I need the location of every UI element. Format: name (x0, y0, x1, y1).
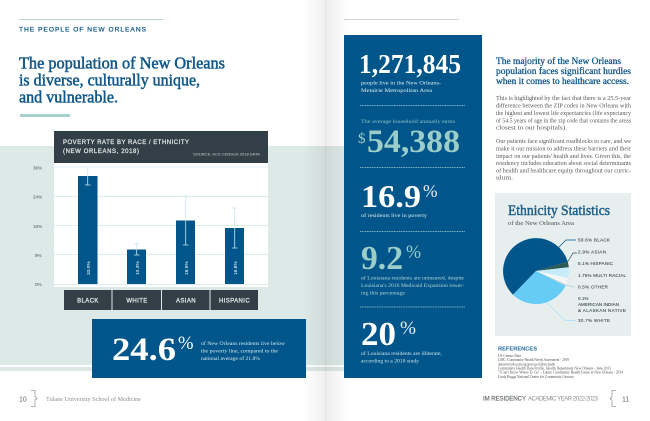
footer right (483, 390, 629, 406)
right column body text: of health and healthcare equity throughout our curric- (496, 168, 631, 174)
callout: 24.6% below poverty line: of New Orleans residents live below (201, 342, 285, 347)
panel: key statistics (344, 35, 482, 378)
bar: black 33.0% (78, 167, 98, 284)
right column heading: population faces significant hurdles (496, 66, 631, 77)
stat: household income: $ (358, 131, 366, 147)
stat: uninsured (361, 240, 465, 296)
ethnicity title (508, 203, 610, 227)
right column heading: when it comes to healthcare access. (496, 76, 629, 87)
references: "I Can't Know Where To Go" - Latino Community Health Issues in New Orleans - 2014 (498, 371, 623, 375)
pie legend labels: 1.75% MULTI RACIAL (578, 273, 626, 278)
references: datacenter.kidscount.org/america-children-health (498, 362, 555, 366)
ethnicity title: of the New Orleans Area (508, 220, 574, 227)
category labels: ASIAN (176, 298, 196, 304)
y axis labels: 9% (35, 253, 42, 258)
y axis labels: 36% (33, 166, 42, 170)
panel: poverty rate chart (33, 131, 268, 310)
footer right: ACADEMIC YEAR 2022-2023 (528, 396, 599, 402)
footer right: 11 (622, 396, 629, 404)
references: US Census Data (498, 354, 521, 358)
stat: uninsured: 9.2 (361, 240, 403, 277)
chart header (54, 131, 268, 163)
right column body text: the highest and lowest life expectancies (life expectancy (496, 110, 631, 117)
right column body text: closest to our hospitals). (496, 124, 568, 132)
pie leader lines (547, 240, 577, 320)
bar: asian 18.9%: 18.9% (184, 261, 190, 275)
category labels: HISPANIC (219, 298, 250, 304)
pie legend labels: AMERICAN INDIAN (578, 302, 619, 307)
category labels: BLACK (77, 298, 99, 304)
stat: uninsured: of Louisiana residents are uninsured, despite (361, 274, 465, 282)
y axis labels: 18% (33, 224, 42, 229)
left page headline: is diverse, culturally unique, (19, 70, 200, 90)
stat: population (359, 48, 461, 94)
footer right: IM RESIDENCY (483, 396, 526, 402)
stat: illiterate: according to a 2018 study (361, 358, 419, 364)
right column body text: ulum. (496, 176, 514, 182)
y axis labels: 24% (33, 194, 42, 200)
references: UMC /Community Health Needs Assessment - 2019 (498, 358, 569, 362)
callout: 24.6% below poverty line: 24.6 (112, 332, 176, 368)
stat: poverty: % (423, 181, 438, 201)
right column body text (496, 95, 632, 182)
callout: 24.6% below poverty line: the poverty line, compared to the (201, 350, 279, 354)
page gutter shadow (303, 0, 349, 421)
stat: poverty (361, 178, 438, 219)
right column body text: of 54.5 years of age in the zip code that contains the areas (496, 118, 632, 124)
stat: uninsured: % (406, 242, 421, 263)
left page headline (19, 54, 225, 106)
footer left: Tulane University School of Medicine (46, 396, 141, 403)
pie legend labels: 58.6% BLACK (578, 238, 611, 242)
right page top rule (344, 19, 459, 20)
footer left: 10 (19, 396, 27, 404)
pie legend labels: 0.1% (578, 296, 588, 301)
stat: illiterate: % (400, 318, 416, 339)
bar: black 33.0%: 33.0% (86, 261, 92, 275)
chart header: SOURCE: ACS CENSUS 2018 DATA (193, 152, 261, 156)
pie legend labels (578, 238, 626, 323)
right column heading: The majority of the New Orleans (496, 56, 621, 67)
bar: asian 18.9% (176, 196, 195, 284)
bar: white 10.3%: 10.3% (135, 261, 141, 275)
pie legend labels: 0.5% OTHER (578, 284, 609, 290)
stat: household income: 54,388 (367, 124, 460, 160)
stat: household income: The average household annually earns (361, 119, 455, 125)
callout: 24.6% below poverty line: % (178, 333, 194, 354)
background band (0, 146, 344, 371)
right column body text: make it our mission to address these barriers and their (496, 146, 631, 152)
pie chart (503, 238, 569, 304)
bar: hispanic 16.8%: 16.8% (233, 261, 239, 275)
category labels: WHITE (126, 298, 148, 304)
y axis labels (33, 166, 42, 287)
right column body text: This is highlighted by the fact that there is a 25.5-year (496, 95, 631, 102)
bar: white 10.3% (127, 244, 146, 284)
references: Lindy Boggs National Center for Community Literacy (498, 375, 574, 379)
stat: uninsured: Louisiana's 2016 Medicaid Expansion lower- (361, 283, 464, 289)
section kicker: THE PEOPLE OF NEW ORLEANS (19, 26, 147, 34)
references: REFERENCES (498, 346, 537, 352)
stat: illiterate (361, 316, 443, 364)
chart header: POVERTY RATE BY RACE / ETHNICITY (63, 140, 189, 146)
stat: poverty: 16.9 (361, 178, 421, 214)
pie legend labels: 30.7% WHITE (578, 318, 610, 323)
stat: uninsured: ing this percentage (361, 290, 406, 296)
pie legend labels: & ALASKAN NATIVE (578, 308, 626, 313)
right column heading (496, 56, 631, 87)
stat: population: people live in the New Orleans- (361, 80, 441, 86)
stat: population: 1,271,845 (359, 48, 461, 79)
chart plot area (54, 163, 268, 287)
pie legend labels: 2.9% ASIAN (578, 250, 606, 254)
right column body text: impact on our patients' health and lives. Given this, the (496, 154, 631, 160)
callout: 24.6% below poverty line (92, 319, 306, 378)
left page headline: and vulnerable. (19, 88, 118, 106)
footer left (19, 390, 141, 406)
stat: population: Metairie Metropolitan Area (361, 88, 433, 94)
left page headline: The population of New Orleans (19, 54, 225, 72)
right column body text: difference between the ZIP codes in New Orleans with (496, 102, 631, 110)
chart header: (NEW ORLEANS, 2018) (63, 149, 139, 155)
y axis labels: 0% (35, 282, 42, 287)
headline accent bar (20, 114, 70, 117)
pie legend labels: 5.1% HISPANIC (578, 261, 614, 266)
right column body text: residency includes education about social determinants (496, 161, 632, 167)
references (498, 346, 623, 379)
stat: illiterate: of Louisiana residents are illiterate, (361, 350, 443, 357)
callout: 24.6% below poverty line: national average of 21.8% (201, 357, 260, 362)
stat: poverty: of residents live in poverty (361, 212, 427, 219)
panel: ethnicity statistics (495, 193, 631, 336)
references: Community Health Data Profile, Health Department New Orleans - June 2013 (498, 366, 611, 372)
right column body text: Our patients face significant roadblocks to care, and we (496, 138, 631, 145)
stat: illiterate: 20 (361, 316, 396, 353)
bar: hispanic 16.8% (225, 208, 244, 284)
ethnicity title: Ethnicity Statistics (508, 203, 610, 219)
category labels (64, 290, 258, 310)
